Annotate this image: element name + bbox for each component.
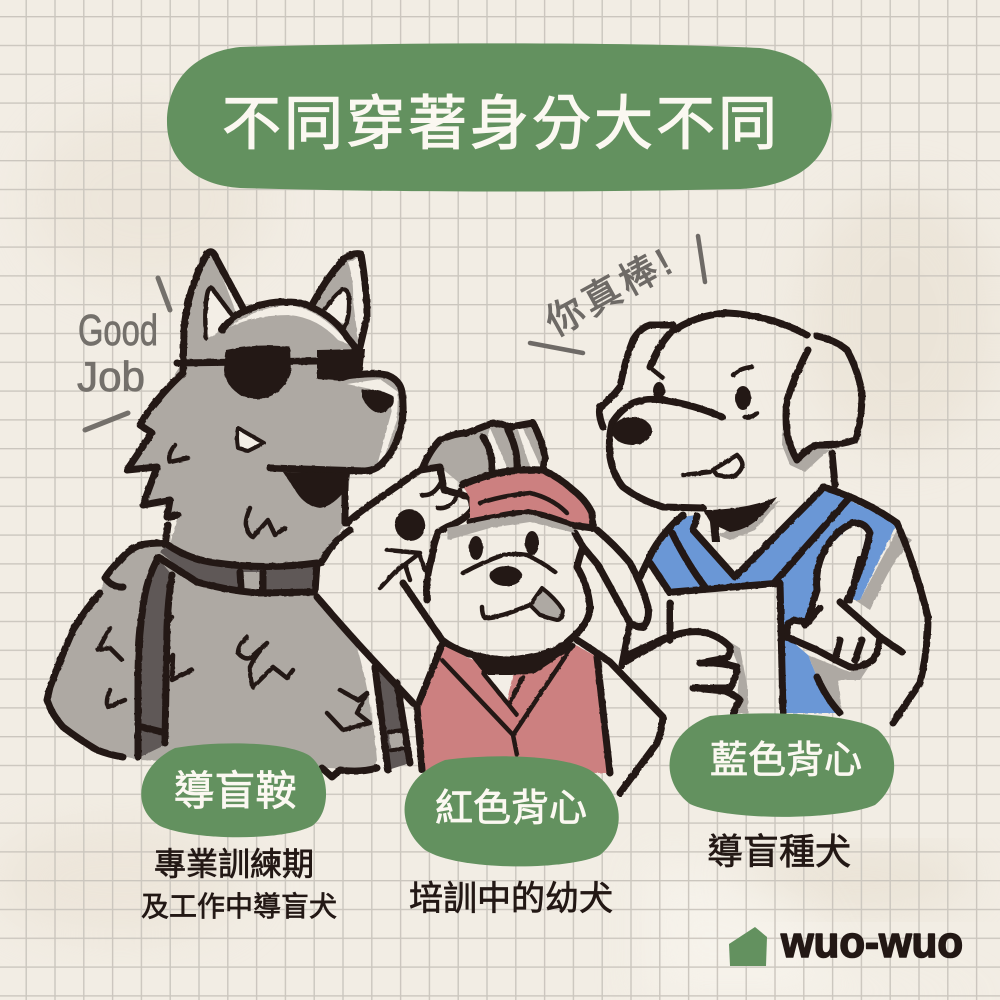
red vest (417, 641, 610, 773)
blue dog vest and body outline (640, 487, 928, 723)
puppy paw on head (420, 423, 545, 532)
wolf collar (158, 545, 317, 593)
brand name: wuo-wuo (780, 918, 963, 967)
dog: guide wolf with harness (47, 252, 413, 777)
puppy facial features (463, 531, 563, 620)
caption: 導盲鞍: 專業訓練期 (154, 846, 314, 882)
icon: house logo (729, 927, 767, 966)
wolf nose (362, 390, 394, 413)
clipboard paper (670, 583, 783, 713)
label: 紅色背心: 紅色背心 (435, 788, 587, 830)
puppy red cap (447, 470, 593, 540)
label: 藍色背心: 藍色背心 (710, 740, 862, 782)
speech: Good Job: Job (77, 353, 145, 400)
dog: guide dog in blue vest (599, 313, 928, 723)
blue dog head (599, 313, 862, 542)
wolf arm line (317, 597, 413, 703)
wolf body (47, 543, 388, 777)
dog: puppy in red vest (347, 423, 665, 793)
speech: Good Job (77, 278, 170, 430)
wolf left harness strap (138, 558, 172, 758)
caption: 導盲鞍: 及工作中導盲犬 (141, 891, 337, 922)
caption: 藍色背心: 導盲種犬 (707, 831, 851, 872)
label: 紅色背心 (405, 756, 619, 866)
hand holding paper (623, 632, 740, 713)
label: 導盲鞍 (141, 743, 326, 837)
label: 藍色背心 (670, 713, 894, 817)
caption: 紅色背心: 培訓中的幼犬 (409, 880, 613, 918)
speech: Good Job: Good (78, 306, 158, 355)
blue vest (650, 488, 897, 713)
wolf right harness strap (375, 667, 410, 770)
wolf mouth (283, 472, 350, 508)
title banner (167, 43, 832, 192)
wolf eye (237, 428, 264, 451)
label: 導盲鞍: 導盲鞍 (174, 768, 296, 814)
title banner: 不同穿著身分大不同 (222, 91, 780, 157)
caption: 導盲鞍 (141, 846, 337, 922)
wolf sunglasses (177, 346, 365, 399)
grey shadows (705, 420, 912, 713)
puppy arm and head outline (347, 470, 665, 793)
speech: 你真棒: 你真棒! (539, 240, 682, 345)
wolf head (127, 252, 403, 575)
